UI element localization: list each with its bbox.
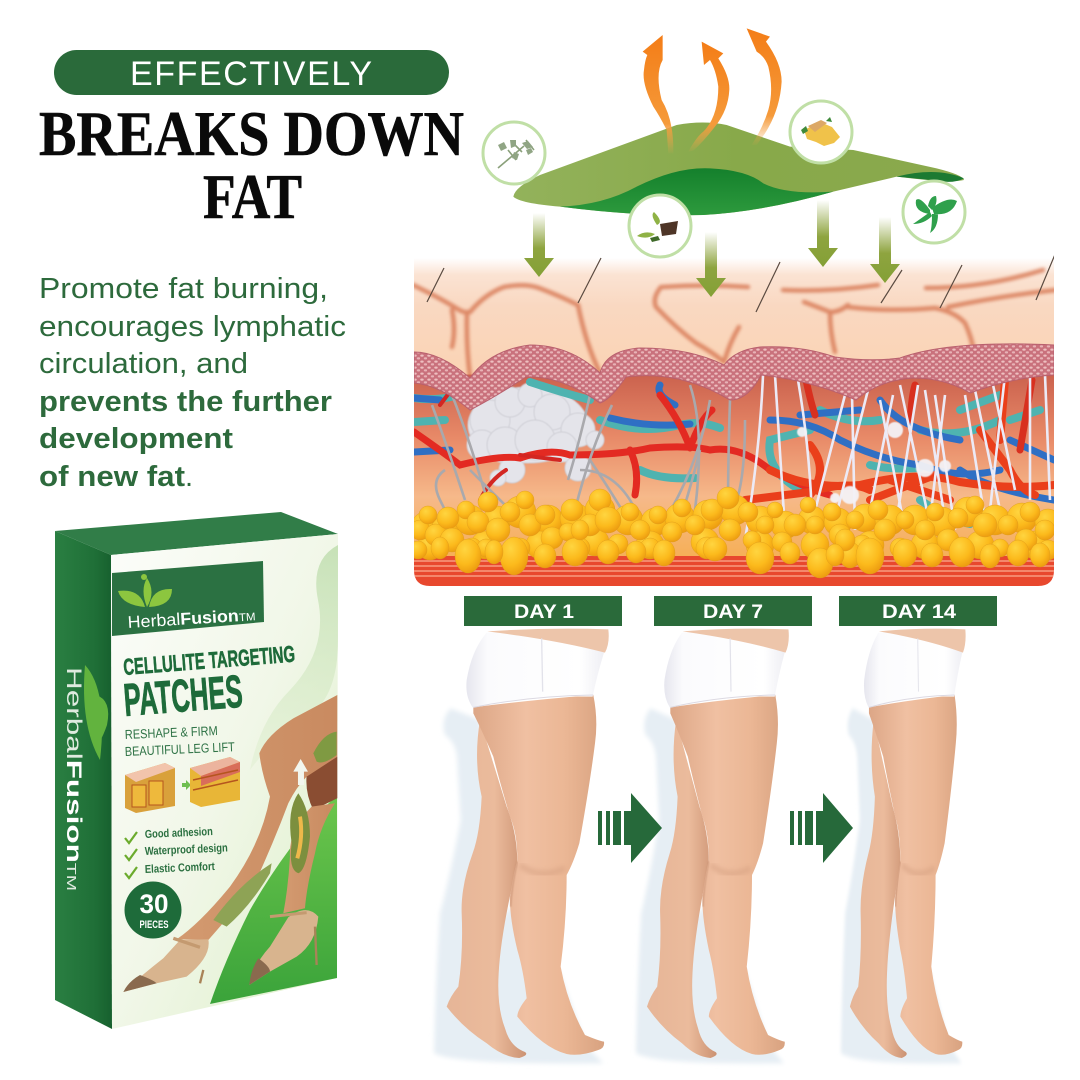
skin surface [414, 258, 1054, 378]
fat globules [409, 487, 1061, 578]
legs: day 7 [636, 629, 789, 1063]
under-skin layer [414, 370, 1054, 565]
product box [55, 512, 338, 1029]
illustration: herbal patch [513, 122, 964, 215]
icon: tea and mortar [629, 195, 691, 257]
text block: benefits: Promote fat burning, [39, 273, 328, 305]
box feature list [125, 826, 228, 878]
box spine: Herbal Fusion TM [62, 667, 85, 891]
icon: ginger [790, 101, 852, 163]
text block: benefits [39, 273, 346, 493]
box tagline: BEAUTIFUL LEG LIFT [124, 739, 235, 759]
box product name: PATCHES [122, 665, 244, 726]
text block: benefits: of new fat [39, 461, 185, 493]
box product name [122, 641, 296, 726]
blue veins [414, 385, 1054, 500]
box product name: CELLULITE TARGETING [122, 641, 296, 680]
logo strip [112, 561, 264, 636]
box badge: 30 pieces: PIECES [140, 919, 168, 931]
box feature list: Good adhesion [145, 826, 213, 841]
arrow: day 7 to day 14 [790, 793, 853, 863]
title [39, 98, 464, 232]
label: day 1 [464, 596, 622, 626]
legs: day 1 [434, 629, 609, 1063]
box tagline [124, 723, 235, 759]
text block: benefits: . [185, 461, 193, 493]
legs: day 14 [841, 629, 966, 1063]
label: day 7: DAY 7 [703, 602, 763, 623]
teal lymph vessels [414, 382, 1040, 524]
icon: herb sprig [483, 122, 545, 184]
box legs illustration [123, 695, 337, 992]
box feature list: Waterproof design [145, 842, 228, 858]
label: day 7 [654, 596, 812, 626]
hairs [427, 252, 1056, 312]
skin cell lines [413, 270, 1056, 377]
pill heading: EFFECTIVELY: EFFECTIVELY [130, 55, 372, 93]
text block: benefits: prevents the further [39, 386, 332, 418]
dermis band [414, 344, 1054, 410]
label: day 1: DAY 1 [514, 602, 574, 623]
box front face [111, 534, 338, 1029]
back fat layer [412, 495, 1061, 560]
box top face [55, 512, 338, 555]
title: BREAKS DOWN [39, 98, 464, 169]
box tagline: RESHAPE & FIRM [124, 723, 218, 742]
text block: benefits: circulation, and [39, 348, 248, 380]
cellulite cluster [467, 383, 604, 486]
illustration: skin cross-section [409, 252, 1061, 586]
logo strip: HerbalFusionTM [127, 605, 256, 632]
white fat fragments [797, 422, 951, 504]
text block: benefits: development [39, 423, 233, 455]
front fat layer [409, 487, 1058, 578]
box spine [55, 531, 112, 1029]
box badge: 30 pieces: 30 [140, 889, 168, 919]
arrows: orange heat arrows [643, 28, 782, 153]
title: FAT [203, 161, 302, 232]
wisps on the box [250, 545, 338, 770]
pill heading: EFFECTIVELY [54, 50, 449, 95]
box feature list: Elastic Comfort [145, 861, 215, 876]
label: day 14: DAY 14 [882, 602, 956, 623]
white fibres [745, 375, 1050, 540]
grey fibres [432, 385, 745, 520]
box badge: 30 pieces [124, 882, 182, 938]
box before and after skin cubes [125, 757, 240, 813]
icon: mint leaves [903, 181, 965, 243]
arrow: day 1 to day 7 [598, 793, 662, 863]
green swoosh on the box [210, 795, 337, 1004]
red arteries [414, 375, 1054, 500]
text block: benefits: encourages lymphatic [39, 311, 346, 343]
arrows: green downward arrows [524, 200, 900, 297]
label: day 14 [839, 596, 997, 626]
muscle layer [414, 556, 1054, 586]
